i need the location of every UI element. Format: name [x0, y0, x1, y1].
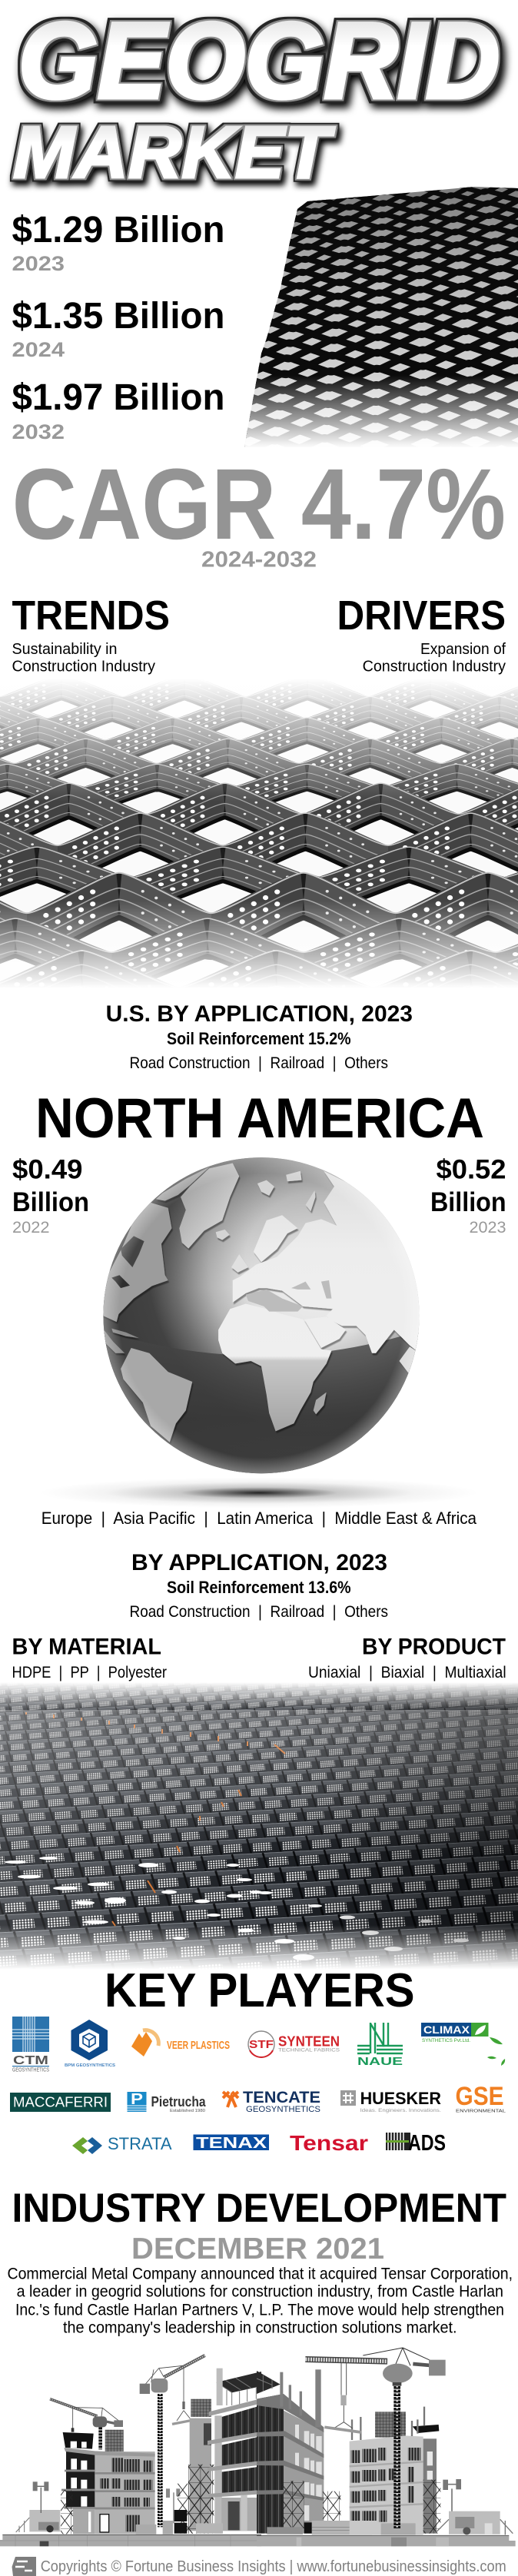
logo: TenCate Geosynthetics [223, 2089, 320, 2114]
2022 value: 2022 [12, 1219, 49, 1237]
logo: Pietrucha: P [131, 2091, 143, 2108]
lamps left [33, 2481, 180, 2523]
2023 value: Billion [430, 1187, 506, 1217]
logo: Veer Plastics [131, 2030, 230, 2056]
arctic canada [156, 1167, 209, 1201]
logo: Huesker: HUESKER [360, 2089, 441, 2108]
stat: 2023 market size [12, 210, 224, 275]
logo: BPM Geosynthetics: BPM GEOSYNTHETICS [65, 2063, 115, 2068]
stat: 2024 market size: $1.35 Billion [12, 296, 224, 337]
continent: north america [100, 1202, 171, 1322]
title word: MARKET: MARKET [13, 111, 335, 194]
drivers block: DRIVERS [337, 593, 506, 639]
stat: 2032 market size: 2032 [12, 420, 65, 443]
region heading: NORTH AMERICA [35, 1087, 484, 1150]
caribbean islands [111, 1329, 139, 1338]
industry development heading [12, 2186, 506, 2266]
2023 value: $0.52 [437, 1155, 506, 1185]
logo: GSE Environmental: ENVIRONMENTAL [456, 2109, 506, 2113]
U.S. by application: Road Construction | Railroad | Others [129, 1054, 388, 1072]
drivers block [337, 593, 506, 675]
island: madagascar [314, 1393, 327, 1414]
2023 value: 2023 [469, 1219, 506, 1237]
U.S. by application: U.S. BY APPLICATION, 2023 [106, 1001, 413, 1027]
footer logo [12, 2557, 36, 2576]
logo: Pietrucha: Established 1980 [170, 2109, 205, 2113]
great lakes [111, 1275, 130, 1288]
left crane [50, 2399, 123, 2449]
continent: eurasia [233, 1171, 425, 1353]
stat: 2032 market size [12, 377, 224, 443]
continent: central america [102, 1329, 125, 1353]
globe shadow [40, 1477, 478, 1508]
logo: ADS: ADS [408, 2131, 446, 2156]
U.S. by application: Soil Reinforcement 15.2% [167, 1029, 351, 1048]
logo: BPM Geosynthetics [65, 2020, 115, 2068]
iceland and arctic islands [216, 1171, 315, 1240]
by application: Soil Reinforcement 13.6% [167, 1578, 351, 1597]
logo: Climax Synthetics: SYNTHETICS Pvt.Ltd. [422, 2038, 470, 2043]
industry development paragraph [8, 2266, 513, 2337]
logo: Synteen: STF [249, 2038, 274, 2051]
trends block: Construction Industry [12, 658, 155, 675]
industry development paragraph: the company's leadership in construction solutions market. [63, 2319, 457, 2337]
orange cable ties [26, 1712, 285, 1926]
stat: 2032 market size: $1.97 Billion [12, 377, 224, 418]
continent: south america [121, 1348, 192, 1442]
continent: britain [231, 1254, 248, 1273]
site left half [0, 2355, 261, 2546]
by product: BY PRODUCT [362, 1634, 506, 1660]
industry development heading: DECEMBER 2021 [131, 2232, 384, 2266]
right building [350, 2407, 440, 2535]
drivers block: Expansion of [420, 641, 506, 658]
tall centre crane [136, 2355, 205, 2535]
stat: 2023 market size: 2023 [12, 252, 65, 275]
trends block: Sustainability in [12, 641, 117, 658]
black and caspian seas [291, 1280, 331, 1299]
illustration: construction site [0, 2348, 516, 2546]
logo: NAUE [357, 2023, 403, 2068]
left building [61, 2430, 155, 2534]
continent: scandinavia [254, 1215, 297, 1262]
2022 value [12, 1155, 89, 1237]
logo: Strata: STRATA [108, 2134, 172, 2153]
logo: TenCate Geosynthetics: GEOSYNTHETICS [246, 2105, 320, 2114]
logo: TenCate Geosynthetics: TENCATE [243, 2089, 320, 2106]
logo: Pietrucha [128, 2091, 206, 2113]
2022 value: $0.49 [12, 1155, 83, 1185]
logo: CTM Geosynthetics: CTM [13, 2054, 48, 2067]
logo: Tenax: TENAX [196, 2135, 267, 2152]
logo: CTM Geosynthetics [12, 2017, 49, 2073]
trends block: TRENDS [12, 593, 170, 639]
logos [10, 2017, 506, 2156]
logo: NAUE: NAUE [357, 2055, 403, 2068]
by application: Road Construction | Railroad | Others [129, 1603, 388, 1621]
key players heading: KEY PLAYERS [105, 1964, 415, 2017]
logo: Tenax [194, 2135, 269, 2152]
CAGR headline: 2024-2032 [201, 547, 317, 572]
stat: 2024 market size: 2024 [12, 338, 65, 361]
globe [100, 1153, 425, 1478]
logo: Synteen: SYNTEEN [278, 2033, 340, 2049]
centre building front [174, 2369, 261, 2534]
by application: BY APPLICATION, 2023 [131, 1550, 387, 1575]
image: perforated honeycomb geogrid [0, 684, 518, 985]
title: Geogrid Market [13, 0, 500, 194]
logo: Strata [72, 2134, 172, 2154]
image: geocell field [0, 1683, 518, 1968]
drivers block: Construction Industry [363, 658, 506, 675]
land masses [100, 1164, 425, 1442]
logo: Synteen: TECHNICAL FABRICS [278, 2049, 340, 2053]
2022 value: Billion [12, 1187, 89, 1217]
by material: HDPE | PP | Polyester [12, 1664, 167, 1681]
site right half [257, 2348, 516, 2546]
ground slab right [257, 2535, 516, 2546]
logo: Pietrucha: Pietrucha [151, 2094, 206, 2110]
hudson bay [121, 1236, 144, 1267]
trends block [12, 593, 170, 675]
logo: Veer Plastics: VEER PLASTICS [167, 2039, 230, 2052]
by material: BY MATERIAL [12, 1634, 161, 1660]
logo: CTM Geosynthetics: GEOSYNTHETICS [12, 2067, 49, 2073]
ground slab left [0, 2535, 261, 2546]
U.S. by application [106, 1001, 413, 1072]
by material [12, 1634, 167, 1681]
by product [308, 1634, 506, 1681]
machine and lamp right [436, 2479, 513, 2535]
sunlit ground patches [5, 1857, 469, 1960]
logo: Huesker: Ideas. Engineers. Innovations. [360, 2108, 441, 2113]
logo: Huesker [340, 2089, 441, 2113]
mediterranean sea [246, 1290, 303, 1312]
logo: Synteen [248, 2031, 340, 2057]
continent: arabia [304, 1316, 346, 1348]
logo: Climax Synthetics [421, 2023, 505, 2066]
other regions: Europe | Asia Pacific | Latin America | Middle East & Africa [42, 1509, 477, 1528]
machine left [16, 2510, 60, 2532]
stat: 2023 market size: $1.29 Billion [12, 210, 224, 251]
title word: GEOGRID: GEOGRID [18, 0, 500, 121]
stat: 2024 market size [12, 296, 224, 361]
2023 value [430, 1155, 506, 1237]
logo: Tensar: Tensar [290, 2131, 368, 2155]
logo: ADS [386, 2131, 446, 2156]
logo: Maccaferri: MACCAFERRI [13, 2095, 108, 2110]
logo: Climax Synthetics: CLIMAX [423, 2023, 470, 2036]
image: black geogrid mesh [244, 187, 518, 447]
centre building right [257, 2369, 372, 2535]
continent: greenland [179, 1164, 239, 1249]
right crane [305, 2348, 446, 2528]
southeast asia [400, 1346, 417, 1374]
continent: africa [218, 1303, 331, 1431]
logo: GSE Environmental: GSE [455, 2082, 504, 2111]
by application [129, 1550, 388, 1621]
